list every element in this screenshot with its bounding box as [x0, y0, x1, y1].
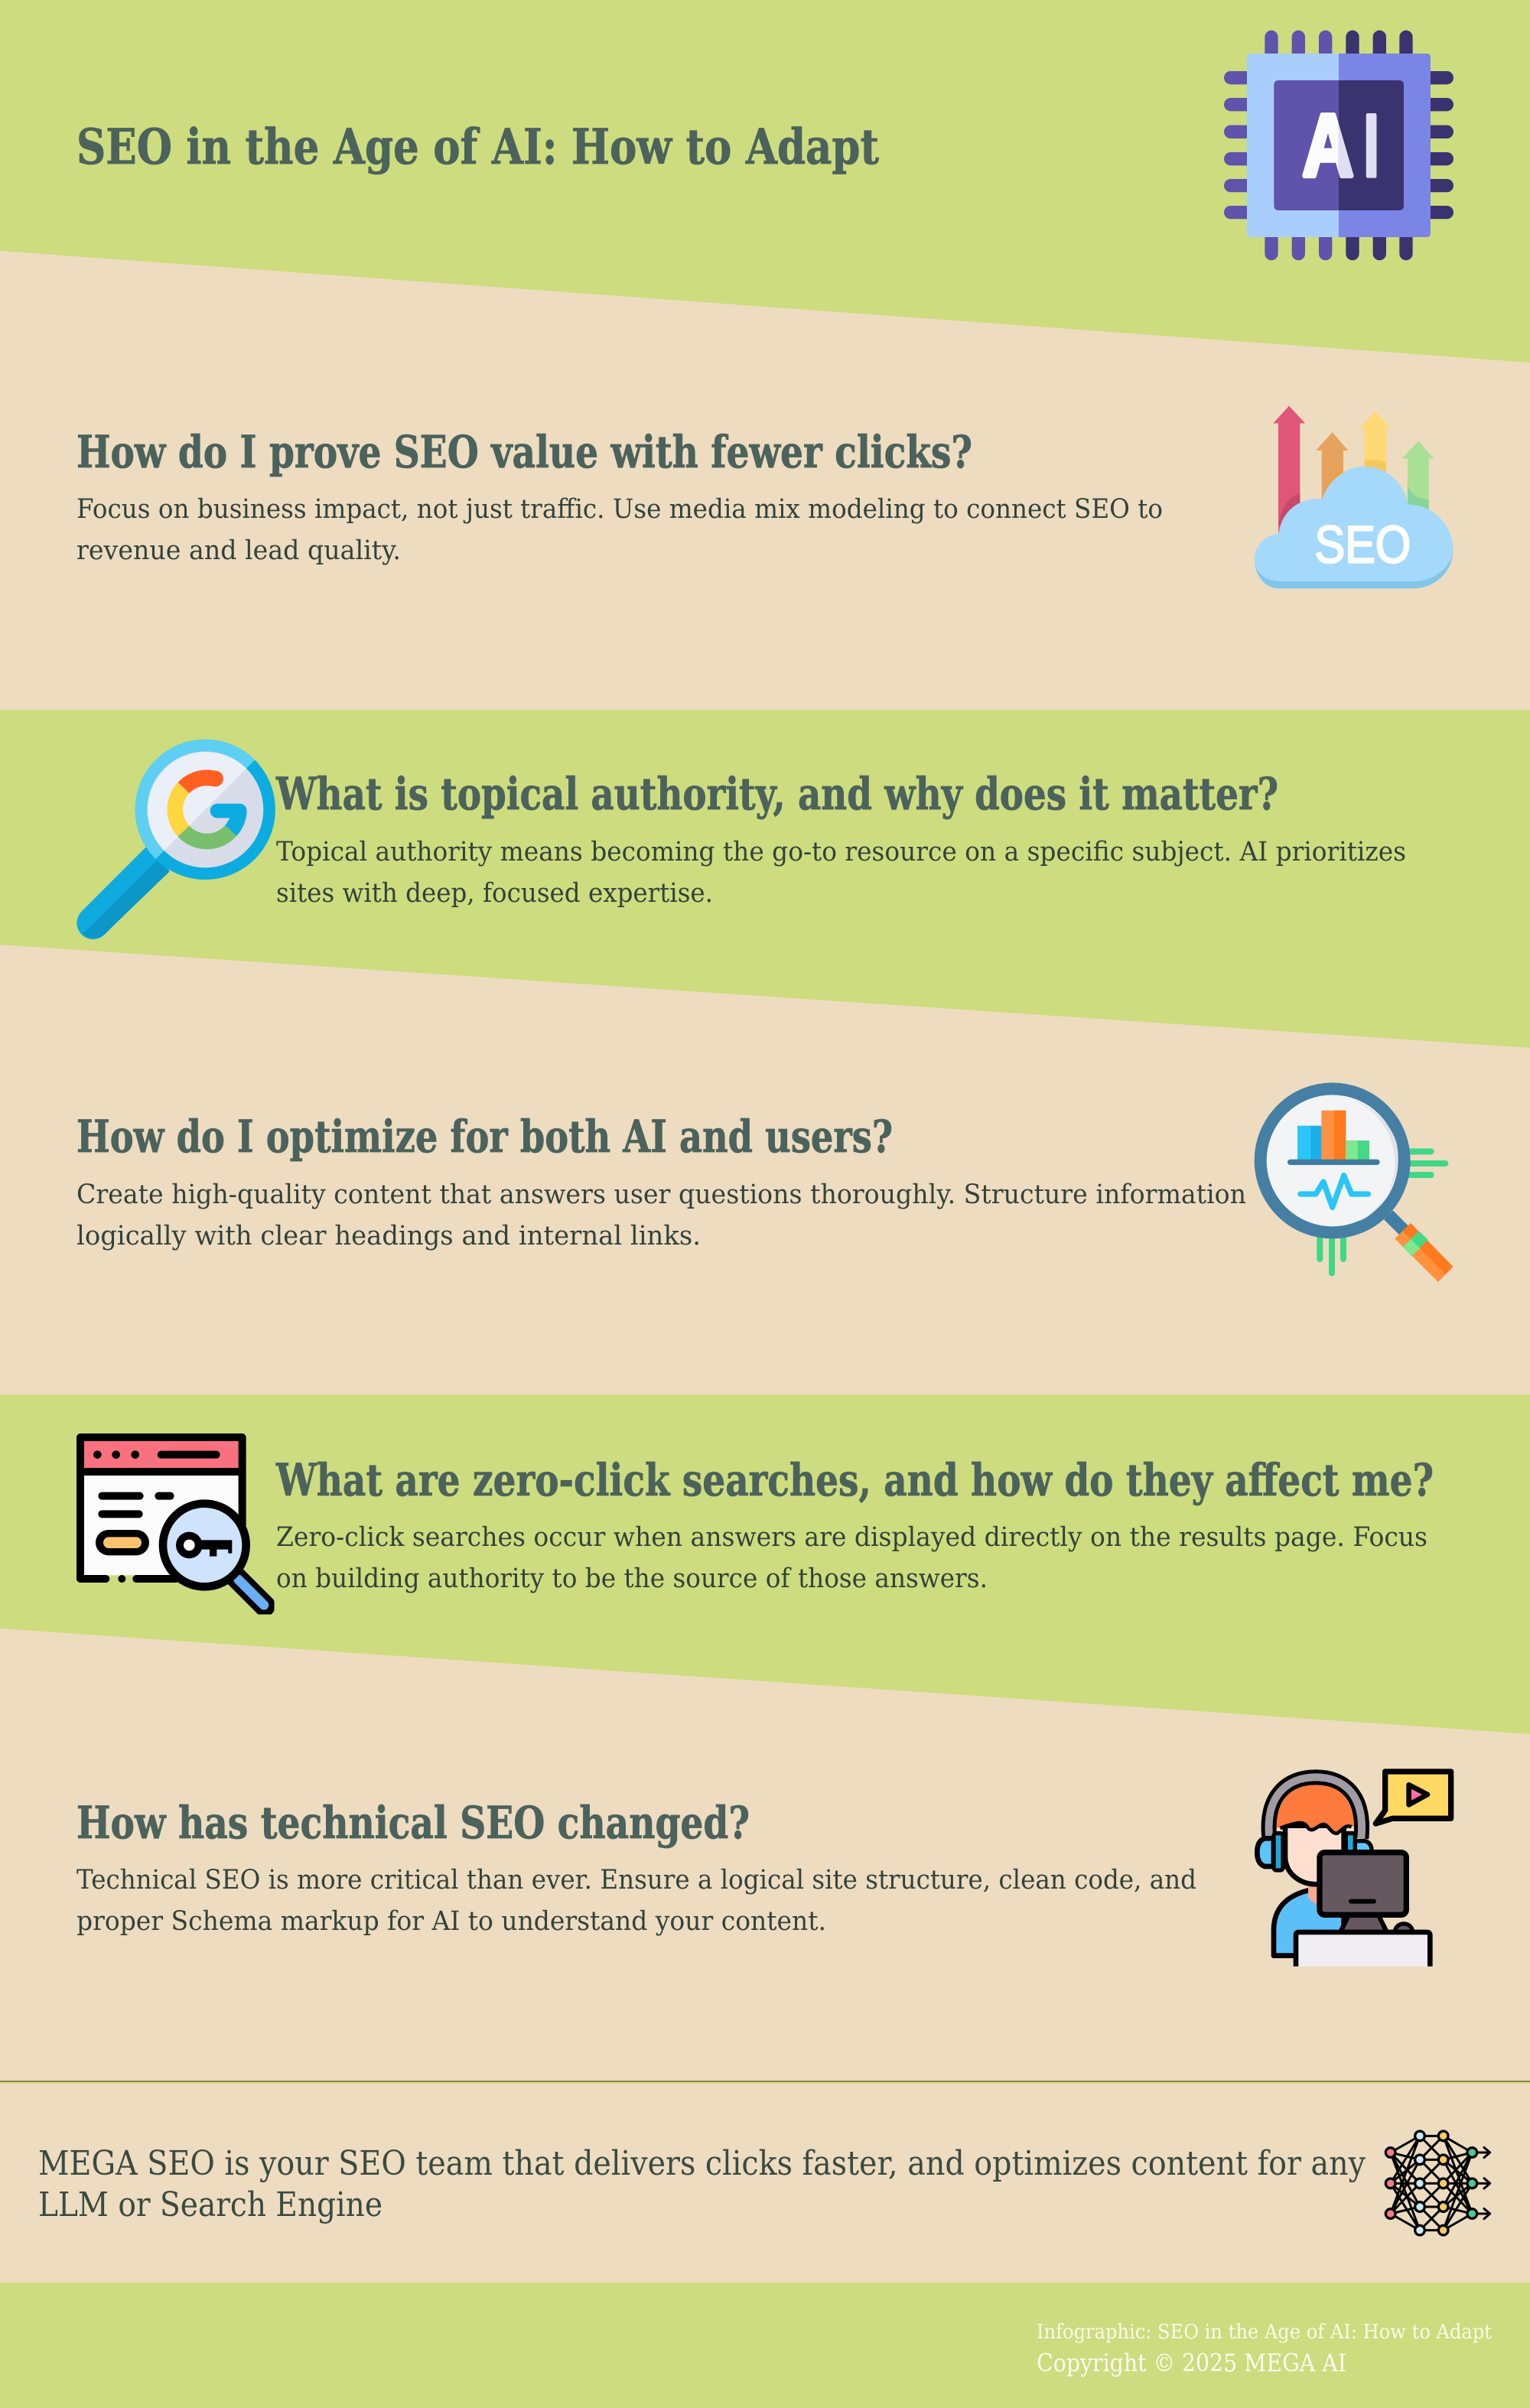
panel: title header	[0, 0, 1530, 363]
icon: AI chip: I	[1364, 97, 1379, 195]
icon: SEO cloud with arrows	[1255, 406, 1453, 588]
title: SEO in the Age of AI: How to Adapt	[76, 119, 879, 176]
text block: prove SEO value: Focus on business impact, not just traffic. Use media mix modeling to connect SEO to	[76, 494, 1163, 525]
heading: AI and users: How do I optimize for both AI and users?	[76, 1111, 893, 1163]
icon: Google magnifying glass	[83, 740, 275, 938]
icon: browser window with key magnifier	[80, 1437, 265, 1606]
text block: AI and users: Create high-quality content that answers user questions thoroughly. Structure information	[76, 1180, 1246, 1210]
footer text	[1037, 2321, 1493, 2377]
panel: zero-click searches	[0, 1394, 1530, 1734]
icon: neural network	[1385, 2131, 1490, 2235]
icon: SEO cloud with arrows: SEO	[1314, 516, 1411, 574]
icon: AI chip	[1231, 37, 1447, 254]
text block: topical authority	[276, 837, 1406, 909]
heading: technical SEO: How has technical SEO changed?	[76, 1797, 750, 1849]
heading: topical authority: What is topical authority, and why does it matter?	[275, 768, 1278, 820]
text block: topical authority: Topical authority means becoming the go-to resource on a specific subject. AI prioritizes	[276, 837, 1406, 867]
footer text: Infographic: SEO in the Age of AI: How to Adapt	[1037, 2321, 1493, 2344]
text block: AI and users	[76, 1180, 1246, 1251]
panel: prove SEO value	[0, 251, 1530, 710]
panel: topical authority	[0, 710, 1530, 1048]
text block: MEGA SEO pitch	[38, 2144, 1366, 2224]
text block: zero-click searches	[276, 1522, 1427, 1594]
icon: AI chip: A	[1303, 97, 1353, 195]
icon: person at computer	[1257, 1772, 1451, 1967]
text block: prove SEO value: revenue and lead quality.	[76, 535, 401, 566]
text block: technical SEO: Technical SEO is more critical than ever. Ensure a logical site structure, clean code, and	[76, 1865, 1196, 1895]
panel: MEGA SEO pitch	[0, 2081, 1530, 2283]
panel: technical SEO	[0, 1629, 1530, 2081]
heading: prove SEO value: How do I prove SEO value with fewer clicks?	[76, 426, 972, 478]
text block: prove SEO value	[76, 494, 1163, 566]
panel: AI and users	[0, 945, 1530, 1394]
panel: footer	[0, 2283, 1530, 2408]
text block: topical authority: sites with deep, focused expertise.	[276, 878, 713, 909]
text block: technical SEO	[76, 1865, 1196, 1937]
icon: analytics magnifier	[1261, 1088, 1453, 1282]
text block: MEGA SEO pitch: LLM or Search Engine	[38, 2185, 382, 2224]
text block: AI and users: logically with clear headings and internal links.	[76, 1221, 701, 1251]
text block: zero-click searches: on building authority to be the source of those answers.	[276, 1564, 988, 1594]
text block: MEGA SEO pitch: MEGA SEO is your SEO team that delivers clicks faster, and optimizes content for any	[38, 2144, 1366, 2183]
text block: technical SEO: proper Schema markup for AI to understand your content.	[76, 1906, 826, 1937]
text block: zero-click searches: Zero-click searches occur when answers are displayed directly on the results page. Focus	[276, 1522, 1427, 1553]
footer text: Copyright © 2025 MEGA AI	[1037, 2348, 1346, 2377]
